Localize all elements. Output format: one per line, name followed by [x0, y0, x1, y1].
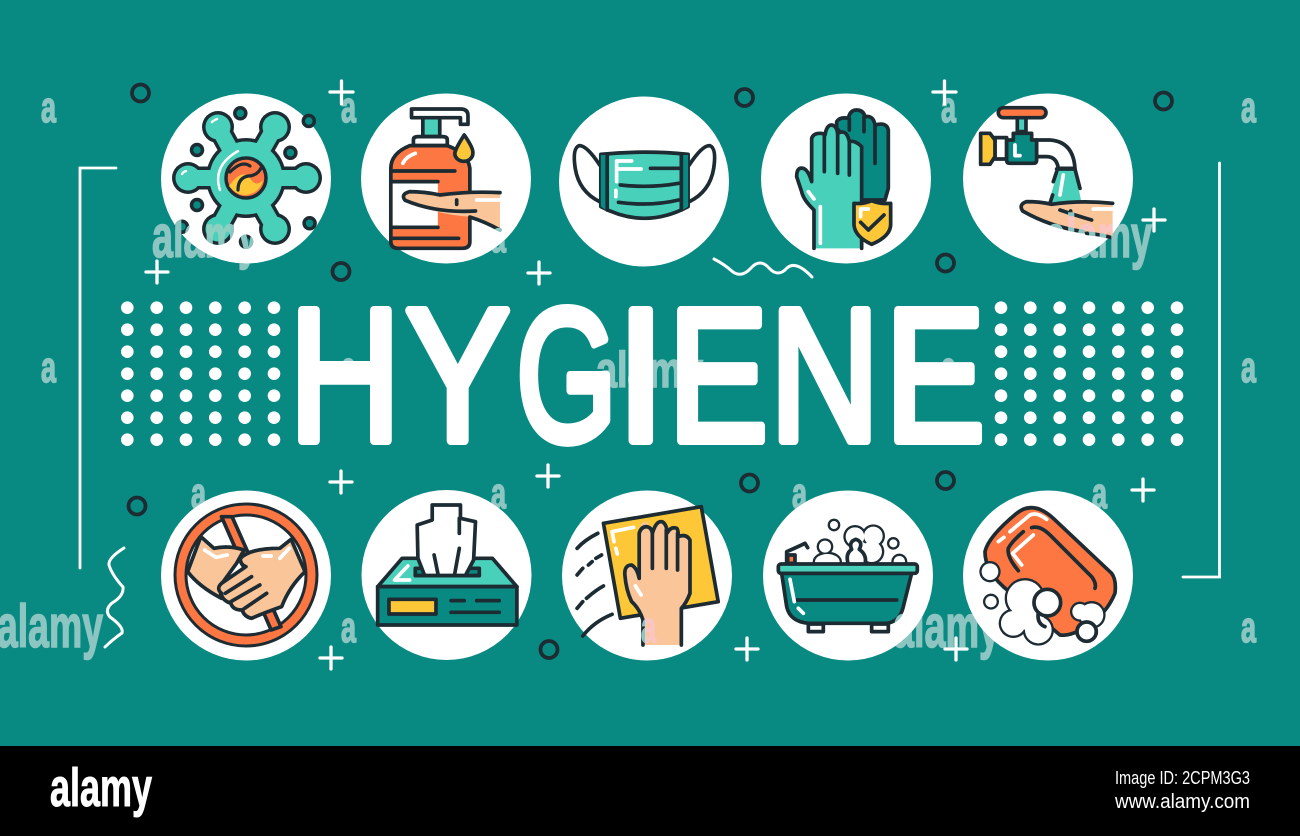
dot grid left — [121, 301, 280, 446]
icon: soap bar with foam — [963, 490, 1133, 660]
icon: virus — [161, 94, 331, 264]
watermark overlay: a — [41, 83, 56, 132]
watermark overlay: a — [41, 343, 56, 392]
squiggle top — [714, 259, 812, 277]
watermark overlay: alamy — [893, 593, 1000, 660]
icon: tissue box — [362, 490, 532, 660]
watermark overlay: a — [941, 83, 956, 132]
watermark overlay: a — [341, 343, 356, 392]
website: www.alamy.com — [1114, 791, 1250, 813]
image id: Image ID: 2CPM3G3 — [1115, 768, 1250, 788]
watermark overlay: alamy — [596, 342, 703, 398]
title: N — [770, 270, 880, 482]
icon: soap dispenser — [361, 94, 531, 264]
decorative rings — [128, 84, 1172, 658]
watermark overlay: a — [1241, 603, 1256, 652]
icon: face mask — [559, 96, 729, 266]
watermark overlay: a — [792, 469, 807, 518]
title: H — [289, 270, 401, 482]
title: Y — [406, 270, 510, 482]
footer band — [0, 746, 1300, 836]
right bracket — [1183, 163, 1220, 577]
watermark overlay: a — [1241, 343, 1256, 392]
icon: wiping hand — [562, 490, 732, 660]
icon: bathtub — [763, 490, 933, 660]
dot grid right — [995, 301, 1183, 446]
title: G — [516, 270, 617, 482]
watermark overlay: a — [341, 603, 356, 652]
squiggle bottom left — [105, 548, 124, 647]
watermark overlay: a — [491, 469, 506, 518]
watermark overlay: alamy — [1045, 203, 1152, 270]
watermark overlay: alamy — [0, 593, 103, 660]
watermark overlay — [0, 83, 1256, 660]
icon: gloves and shield — [761, 94, 931, 264]
icon: no handshake — [161, 490, 331, 660]
watermark overlay: alamy — [152, 203, 259, 270]
watermark overlay: a — [1241, 83, 1256, 132]
watermark overlay: a — [191, 469, 206, 518]
left bracket — [80, 168, 116, 568]
watermark overlay: a — [341, 83, 356, 132]
watermark overlay: a — [641, 603, 656, 652]
watermark overlay: a — [491, 213, 506, 262]
icon: faucet and hand — [963, 94, 1133, 264]
footer logo: alamy — [50, 758, 152, 818]
decorative plus signs — [146, 81, 1165, 669]
title: E — [668, 270, 768, 482]
title: I — [617, 270, 665, 482]
watermark overlay: a — [1092, 469, 1107, 518]
watermark overlay: a — [941, 343, 956, 392]
title: E — [885, 270, 985, 482]
